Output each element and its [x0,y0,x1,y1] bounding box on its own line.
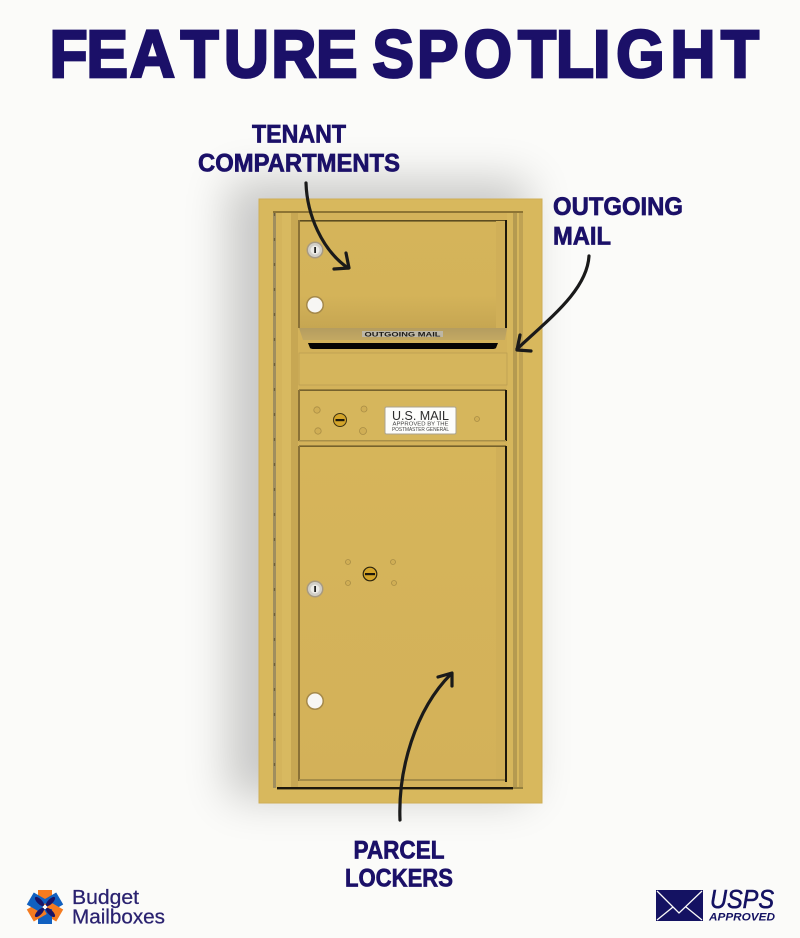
knob [306,692,324,710]
outer frame [259,199,542,803]
label: parcel lockers: PARCEL [354,836,444,864]
mailbox unit [228,180,542,803]
arrow: outgoing mail [517,256,589,351]
wall shadow [228,180,528,798]
tenant compartment door [298,220,507,328]
label: tenant compartments: TENANT [252,120,346,148]
flap label: OUTGOING MAIL [364,332,440,338]
icon: logo mark [27,890,63,924]
master door [298,390,507,442]
approved wordmark: APPROVED [708,912,775,924]
USPS wordmark: USPS [710,886,774,914]
arrow: parcel lockers [400,673,452,820]
label: parcel lockers: LOCKERS [345,864,453,892]
inner recess [273,212,523,788]
U.S. Mail plate: APPROVED BY THE [392,422,449,428]
label: parcel lockers [345,836,453,892]
lock [306,242,324,258]
label: tenant compartments: COMPARTMENTS [198,150,400,178]
label: outgoing mail [553,193,683,250]
U.S. Mail plate: POSTMASTER GENERAL [392,427,449,433]
arrow: tenant compartments [306,183,349,269]
lower flap panel [299,353,507,385]
outgoing mail flap [299,328,507,353]
icon: envelope [656,890,703,921]
parcel lock [363,567,377,581]
mail slot [308,343,498,349]
label: outgoing mail: OUTGOING [553,193,683,221]
U.S. Mail plate: U.S. MAIL [392,408,449,423]
rivets [314,406,480,434]
U.S. Mail plate [385,407,456,434]
knob [306,296,324,314]
rivets [346,560,396,586]
title: FEATURE SPOTLIGHT [50,17,759,92]
flap label [362,331,443,338]
label: outgoing mail: MAIL [553,222,611,250]
lock [306,580,324,598]
logo: USPS approved [656,886,775,924]
logo wordmark: Budget [72,887,139,909]
logo wordmark: Mailboxes [72,906,165,928]
label: tenant compartments [198,120,400,178]
logo wordmark [72,887,165,928]
logo: Budget Mailboxes [27,887,165,928]
master lock [334,414,346,426]
parcel locker door [298,446,507,782]
